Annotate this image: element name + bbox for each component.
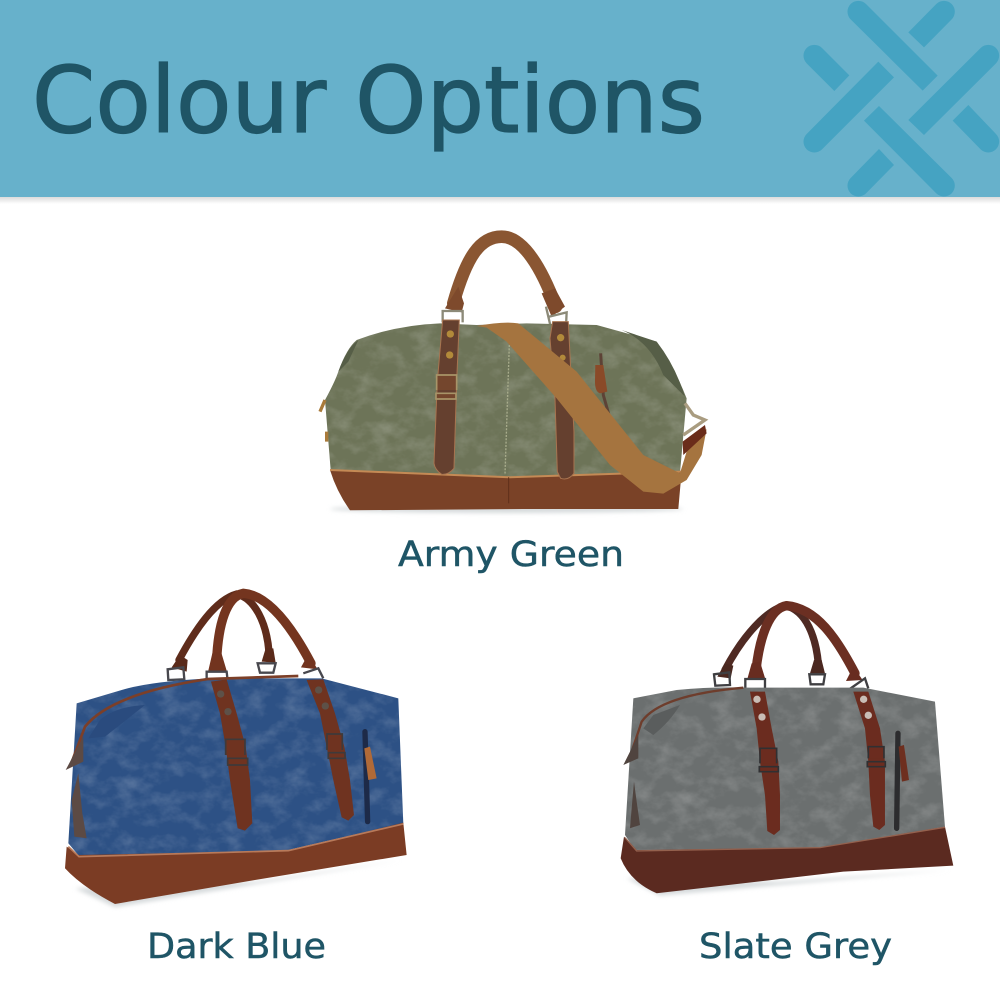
label: dark blue: Dark Blue <box>147 927 326 967</box>
green bag left buckle <box>436 375 457 399</box>
blue bag leather base <box>65 823 407 904</box>
blue bag buckles <box>226 734 345 765</box>
blue bag left strap <box>211 679 252 831</box>
title: Colour Options <box>32 47 705 154</box>
grey bag left strap <box>750 692 780 835</box>
green bag handle <box>453 237 556 307</box>
green bag strap clip <box>683 425 707 455</box>
product: dark blue bag <box>65 593 407 907</box>
grey bag rivets <box>753 696 872 721</box>
green bag right strap <box>550 322 574 479</box>
blue bag zip edge <box>70 676 298 767</box>
grey bag back handle <box>725 606 818 670</box>
label: slate grey: Slate Grey <box>699 927 892 967</box>
grey bag front handle <box>756 606 855 673</box>
blue bag side clip <box>66 737 87 838</box>
green bag rings <box>443 307 567 327</box>
grey bag canvas body <box>625 687 945 850</box>
blue bag front handle <box>217 593 311 663</box>
grey bag zip edge <box>632 688 743 752</box>
header banner <box>0 0 1000 204</box>
grey bag side clip <box>623 735 640 828</box>
label: army green: Army Green <box>398 535 624 575</box>
blue bag zip pocket <box>365 732 368 822</box>
green bag leather base <box>330 470 682 510</box>
green bag shaded ends <box>338 330 685 397</box>
green bag rivets <box>446 330 566 361</box>
grey bag right strap <box>853 692 885 830</box>
product: army green bag <box>320 237 707 513</box>
blue bag back handle <box>179 594 269 660</box>
green bag zip pocket <box>601 353 612 424</box>
grey bag leather base <box>621 827 953 893</box>
icon: woven cross logo <box>803 1 999 196</box>
green bag left strap <box>434 320 459 474</box>
green bag centre seam <box>505 345 509 475</box>
grey bag rings <box>714 672 868 690</box>
grey bag buckles <box>759 747 885 772</box>
blue bag right strap <box>307 679 354 821</box>
blue bag rivets <box>217 686 329 715</box>
blue bag rings <box>168 663 323 682</box>
green bag canvas body <box>325 323 687 479</box>
grey bag zip pocket <box>897 733 898 828</box>
product: slate grey bag <box>621 606 953 896</box>
green bag shoulder strap <box>477 323 707 494</box>
blue bag canvas body <box>68 678 403 857</box>
